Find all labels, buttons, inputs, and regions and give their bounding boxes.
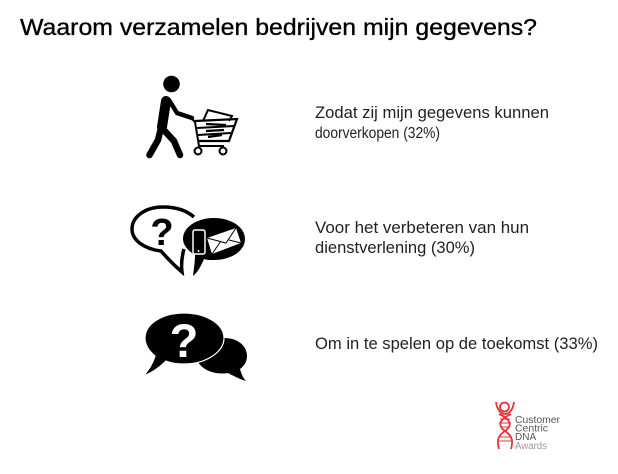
text: improving services — [315, 219, 529, 257]
title: Waarom verzamelen bedrijven mijn gegevens? — [20, 14, 537, 40]
logo: Customer Centric DNA Awards — [496, 402, 561, 452]
icon: DNA figure — [496, 402, 514, 449]
text: anticipating the future: Om in te spelen op de toekomst (33%) — [315, 335, 598, 353]
envelope — [207, 228, 241, 254]
text: improving services: dienstverlening (30%) — [315, 239, 475, 257]
icon: two question speech bubbles — [143, 313, 247, 381]
question mark: ? — [170, 314, 198, 367]
logo text: DNA — [515, 432, 536, 443]
logo text: Awards — [515, 441, 547, 452]
icon: question bubble and phone and mail bubble — [132, 207, 245, 276]
phone — [193, 230, 205, 254]
question mark: ? — [150, 212, 174, 254]
logo text: Centric — [515, 424, 548, 434]
logo text: Customer — [515, 415, 561, 426]
logo text — [515, 415, 561, 452]
text: resell data — [315, 104, 549, 142]
icon: person with shopping cart — [150, 76, 237, 155]
text: resell data: doorverkopen (32%) — [315, 125, 440, 142]
text: resell data: Zodat zij mijn gegevens kunnen — [315, 104, 549, 122]
text: improving services: Voor het verbeteren van hun — [315, 219, 529, 237]
